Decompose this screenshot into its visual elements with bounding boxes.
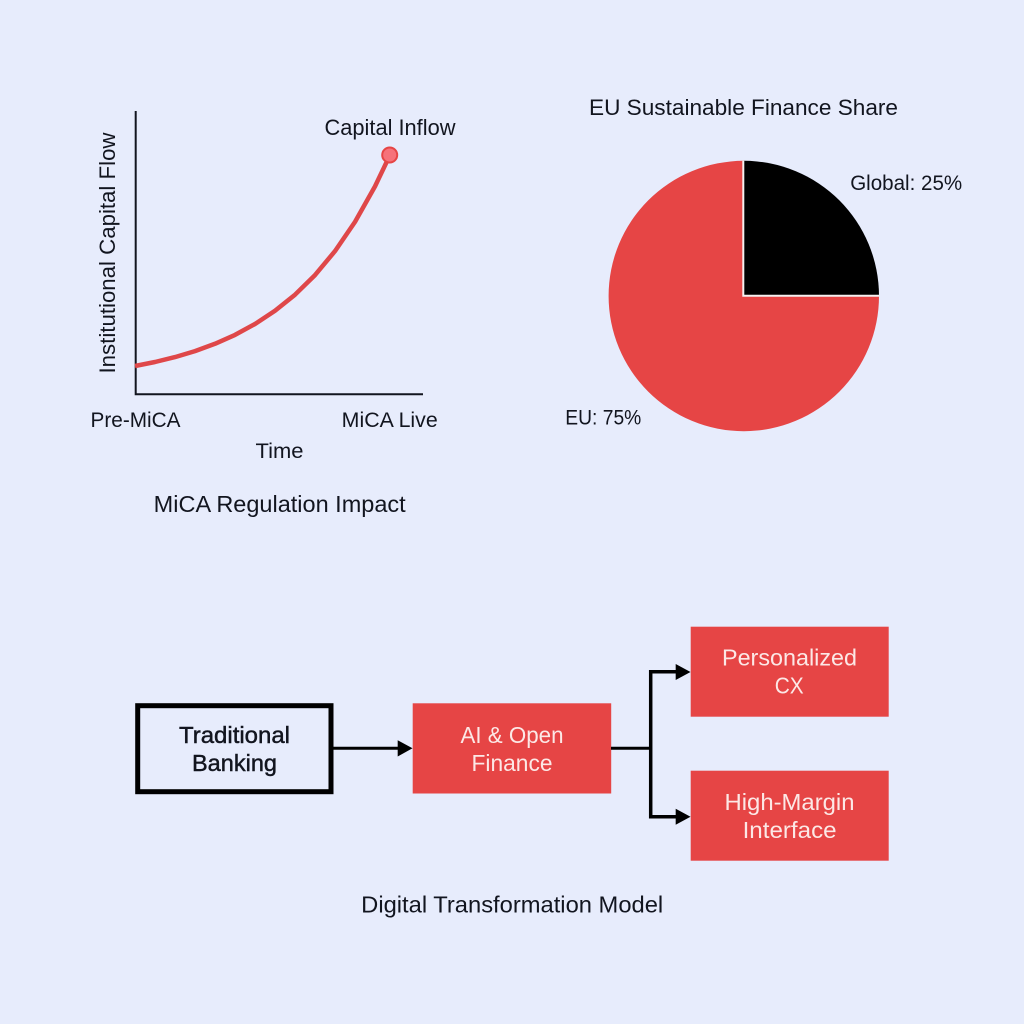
pie slice divider [743,161,879,296]
arrow: branching connector [611,664,690,825]
y axis label: Institutional Capital Flow [95,132,120,374]
panel: EU sustainable finance pie chart [565,95,962,431]
curve label: Capital Inflow [324,115,456,140]
label: Global: Global: 25% [850,172,962,195]
box: Personalized CX [691,627,889,717]
pie slice: EU 75% [609,161,879,431]
box: Personalized CX: Personalized [722,644,857,670]
x tick: Pre-MiCA: Pre-MiCA [90,409,180,432]
box: AI and Open Finance: AI & Open [460,722,564,748]
diagram caption: Digital Transformation Model [361,891,663,917]
chart axes [136,111,423,394]
arrow: Traditional Banking to AI [333,740,412,756]
box: High-Margin Interface: Interface [743,817,837,843]
x axis label: Time [256,440,304,463]
capital inflow curve [135,157,389,366]
box: Traditional Banking [138,706,331,792]
box: Traditional Banking: Traditional [179,722,290,748]
label: EU: EU: 75% [565,406,641,430]
panel: MiCA line chart [90,111,456,517]
pie slice: Global 25% [744,161,879,296]
box: Personalized CX: CX [775,672,804,698]
box: High-Margin Interface: High-Margin [724,789,854,815]
box: AI and Open Finance: Finance [472,750,552,776]
x tick: MiCA Live: MiCA Live [342,409,438,432]
chart caption: MiCA Regulation Impact [154,491,406,517]
pie title: EU Sustainable Finance Share [589,95,898,120]
box: High-Margin Interface [691,771,889,861]
panel: digital transformation flow diagram [138,627,889,917]
curve end marker [382,148,397,162]
box: AI and Open Finance [413,703,611,794]
box: Traditional Banking: Banking [192,750,277,776]
